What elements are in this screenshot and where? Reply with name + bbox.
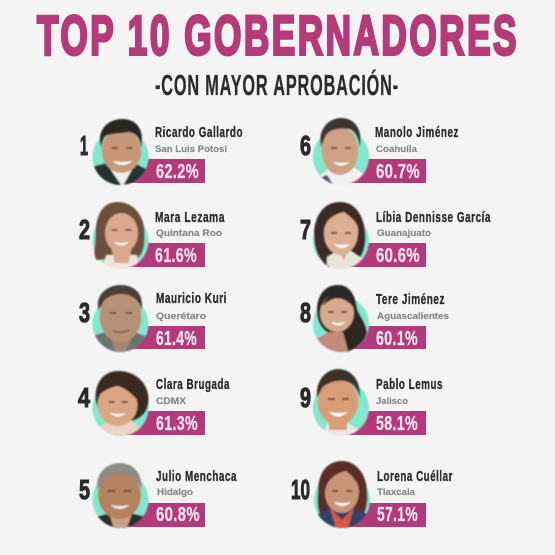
portrait: [313, 118, 369, 187]
name: Mara Lezama: [155, 210, 225, 226]
percentage bar background: [346, 411, 426, 435]
entry 4: Clara Brugada: [78, 371, 230, 438]
percentage: 62.2%: [156, 161, 199, 183]
percentage bar background: [125, 326, 205, 349]
entry 1: Ricardo Gallardo: [80, 119, 243, 187]
percentage bar background: [125, 503, 205, 527]
rank 6: 6: [300, 130, 311, 161]
state: Aguascalientes: [377, 311, 449, 322]
percentage bar background: [346, 243, 426, 267]
name: Ricardo Gallardo: [155, 125, 243, 141]
entry 8: Tere Jiménez: [300, 285, 449, 354]
entry 6: Manolo Jiménez: [300, 118, 459, 187]
entry 7: Líbia Dennisse García: [300, 202, 491, 271]
rank 3: 3: [79, 297, 90, 328]
portrait: [313, 369, 369, 438]
percentage: 61.4%: [156, 328, 197, 350]
percentage: 60.7%: [376, 161, 420, 183]
name: Manolo Jiménez: [375, 125, 459, 141]
portrait: [90, 463, 150, 530]
rank 5: 5: [79, 474, 90, 505]
rank 4: 4: [78, 382, 90, 413]
entry 5: Julio Menchaca: [79, 463, 237, 530]
name: Líbia Dennisse García: [376, 210, 491, 226]
rank 8: 8: [300, 297, 311, 328]
percentage bar background: [346, 503, 426, 527]
percentage: 60.1%: [376, 328, 418, 350]
state: Querétaro: [156, 311, 206, 322]
percentage bar background: [346, 326, 426, 349]
name: Pablo Lemus: [376, 377, 443, 393]
percentage: 57.1%: [377, 504, 418, 526]
rank 1: 1: [80, 130, 88, 161]
state: Guanajuato: [377, 228, 431, 239]
state: Coahuila: [376, 144, 418, 155]
rank 2: 2: [79, 214, 90, 245]
state: Hidalgo: [157, 487, 193, 498]
percentage: 61.6%: [155, 245, 197, 267]
state: San Luis Potosí: [155, 144, 227, 155]
percentage: 60.8%: [156, 504, 200, 526]
state: CDMX: [156, 396, 187, 407]
name: Lorena Cuéllar: [377, 469, 453, 485]
rank 7: 7: [300, 214, 311, 245]
name: Clara Brugada: [156, 377, 230, 393]
percentage: 60.6%: [376, 245, 420, 267]
percentage: 61.3%: [156, 413, 198, 435]
entry 2: Mara Lezama: [79, 202, 225, 271]
percentage bar background: [125, 159, 205, 183]
name: Julio Menchaca: [156, 469, 237, 485]
name: Tere Jiménez: [376, 292, 445, 308]
name: Mauricio Kuri: [156, 291, 227, 307]
portrait: [314, 461, 370, 530]
state: Quintana Roo: [156, 228, 222, 239]
portrait: [313, 285, 369, 354]
portrait: [90, 285, 150, 354]
percentage bar background: [125, 411, 205, 435]
state: Tlaxcala: [377, 487, 416, 498]
portrait: [313, 202, 369, 271]
portrait: [92, 202, 148, 271]
portrait: [90, 119, 150, 187]
entry 3: Mauricio Kuri: [79, 285, 227, 354]
percentage: 58.1%: [376, 413, 418, 435]
entry 10: Lorena Cuéllar: [291, 461, 453, 530]
rank 9: 9: [300, 382, 311, 413]
entry 9: Pablo Lemus: [300, 369, 443, 438]
rank 10: 10: [291, 474, 310, 505]
percentage bar background: [346, 159, 426, 183]
portrait: [92, 371, 148, 438]
state: Jalisco: [376, 396, 408, 407]
percentage bar background: [125, 243, 205, 267]
